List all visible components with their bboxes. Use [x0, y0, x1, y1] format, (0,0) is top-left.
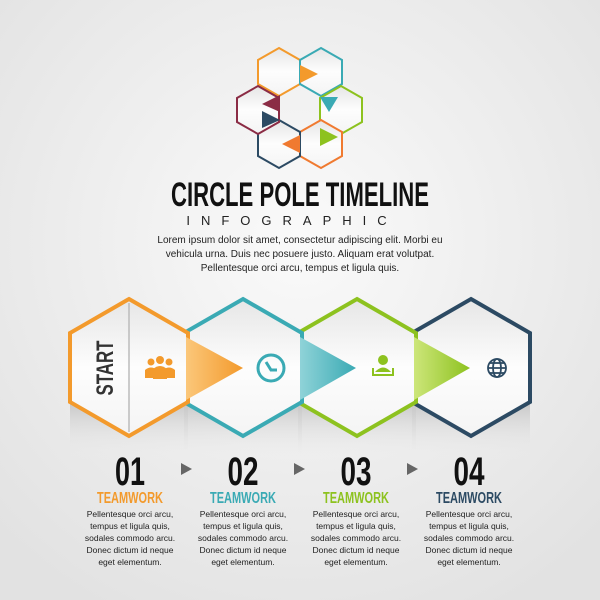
step 2: Pellentesque orci arcu, [200, 509, 286, 519]
icon: globe [488, 359, 506, 377]
step 1: TEAMWORK [97, 490, 163, 507]
step 1: Pellentesque orci arcu, [87, 509, 173, 519]
step 4: Pellentesque orci arcu, [426, 509, 512, 519]
step 2: sodales commodo arcu. [198, 533, 288, 543]
icon: person at laptop [372, 355, 394, 376]
subtitle: INFOGRAPHIC [186, 213, 398, 228]
step arrows [181, 463, 418, 475]
step 3: 03 [340, 450, 372, 494]
title: CIRCLE POLE TIMELINE [171, 176, 429, 214]
step 4: eget elementum. [437, 557, 501, 567]
step 2: 02 [228, 450, 258, 494]
step 4: Donec dictum id neque [426, 545, 513, 555]
step 1: sodales commodo arcu. [85, 533, 175, 543]
step 2: TEAMWORK [210, 490, 276, 507]
icon: clock [258, 355, 284, 381]
intro text: Lorem ipsum dolor sit amet, consectetur adipiscing elit. Morbi eu [157, 235, 443, 246]
icon: team [145, 356, 175, 379]
hexagon 1 [70, 299, 243, 436]
step 1: tempus et ligula quis, [90, 521, 170, 531]
intro text: vehicula urna. Duis nec posuere justo. Aliquam erat volutpat. [166, 249, 434, 260]
shadows [70, 400, 530, 460]
step 3: Pellentesque orci arcu, [313, 509, 399, 519]
step 4: TEAMWORK [436, 490, 502, 507]
step 3: Donec dictum id neque [313, 545, 400, 555]
step 1: 01 [115, 450, 145, 494]
step 2: Donec dictum id neque [200, 545, 287, 555]
intro text [157, 235, 443, 274]
step 3 [311, 450, 401, 567]
step 4 [424, 450, 514, 567]
hexagon 4 [412, 299, 530, 436]
step 4: tempus et ligula quis, [429, 521, 509, 531]
step 2: tempus et ligula quis, [203, 521, 283, 531]
step 3: TEAMWORK [323, 490, 389, 507]
step 1: Donec dictum id neque [87, 545, 174, 555]
logo: hexagon ring [237, 48, 362, 168]
hexagon 3 [298, 299, 470, 436]
step 1 [85, 450, 175, 567]
step 4: sodales commodo arcu. [424, 533, 514, 543]
arrow into hex 3 [300, 337, 356, 400]
step 1: eget elementum. [98, 557, 162, 567]
start label: START [92, 340, 119, 396]
step 3: tempus et ligula quis, [316, 521, 396, 531]
arrow into hex 4 [414, 337, 470, 400]
step 3: eget elementum. [324, 557, 388, 567]
arrow into hex 2 [186, 337, 243, 400]
step 4: 04 [454, 450, 485, 494]
step 2: eget elementum. [211, 557, 275, 567]
step 2 [198, 450, 288, 567]
step 3: sodales commodo arcu. [311, 533, 401, 543]
intro text: Pellentesque orci arcu, tempus et ligula quis. [201, 263, 399, 274]
hexagon 2 [184, 299, 356, 436]
